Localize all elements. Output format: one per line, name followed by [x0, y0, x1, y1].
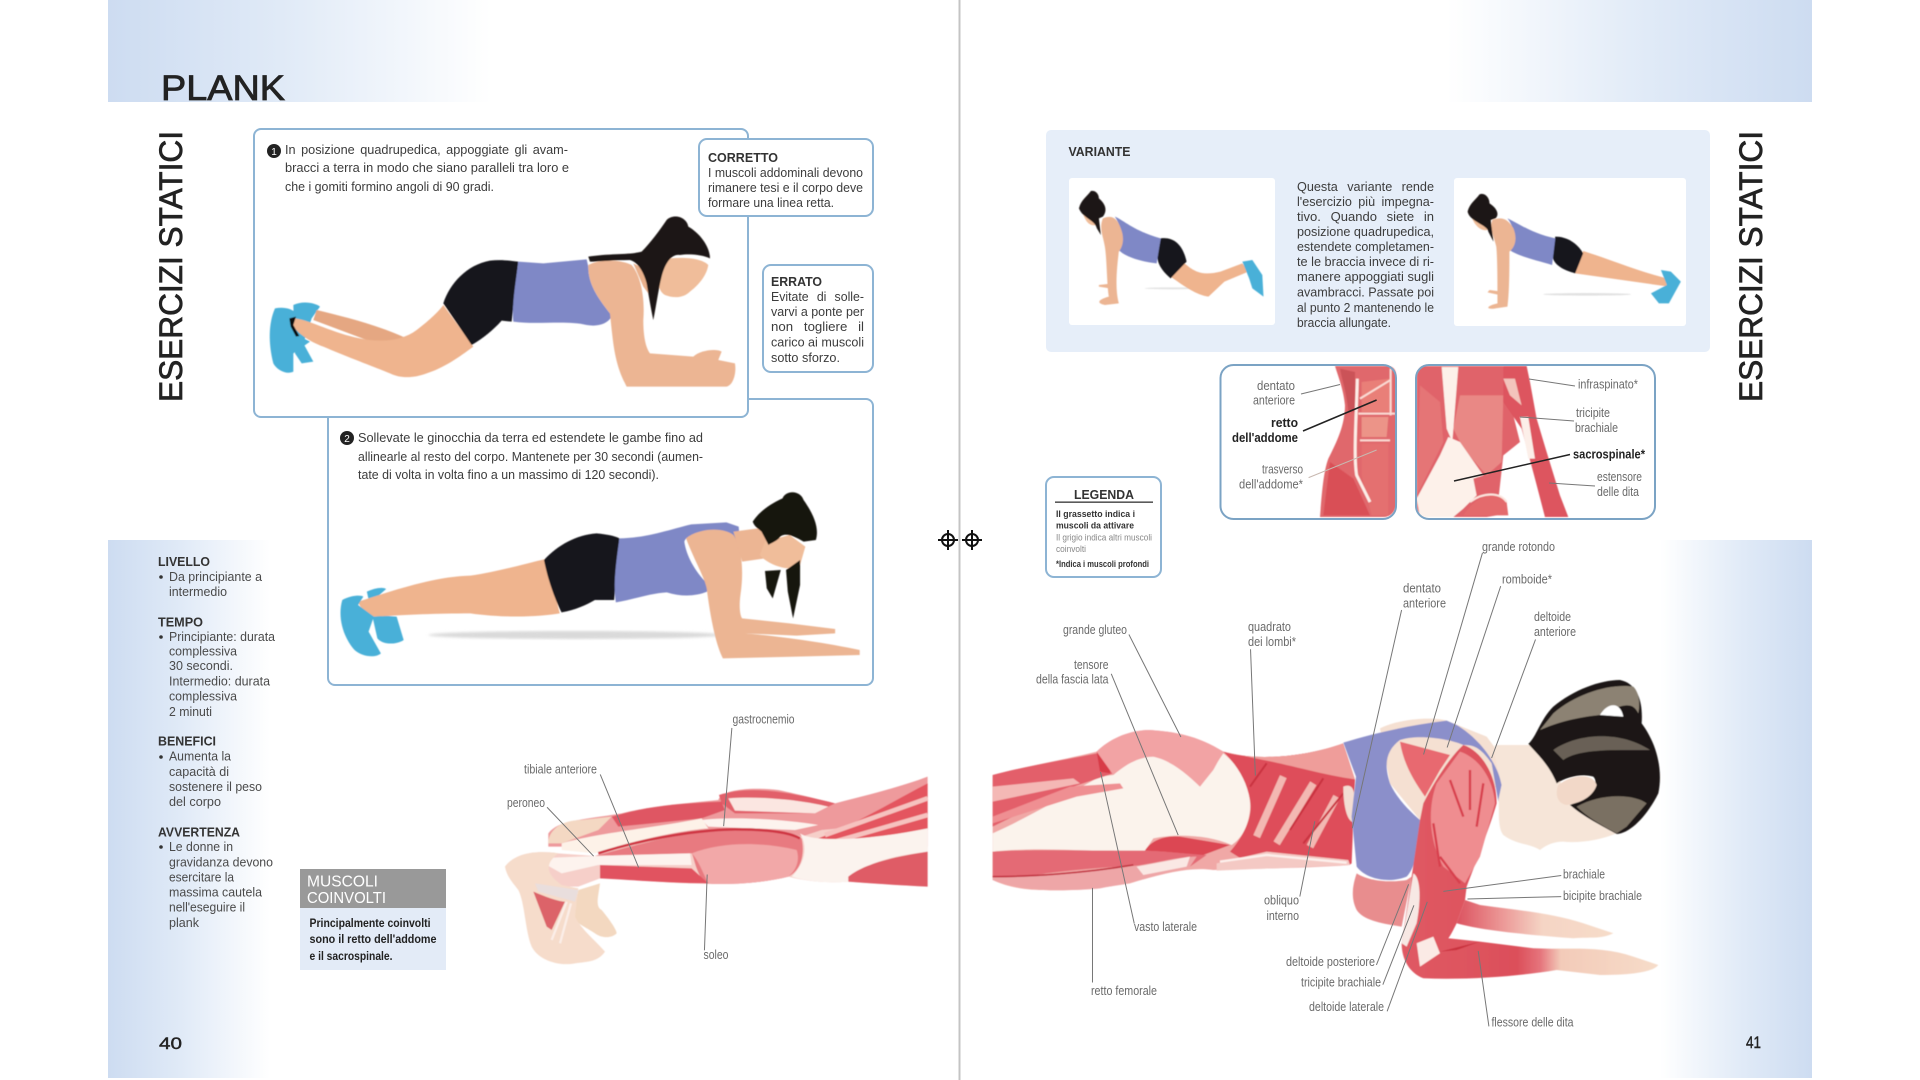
callout: corretto: rimanere tesi e il corpo deve [708, 180, 863, 195]
info: tempo: Intermedio: durata [169, 674, 271, 688]
sidebar band left [108, 540, 270, 1078]
panel: abdomen muscles: anteriore [1253, 392, 1295, 408]
anatomy labels: flessore delle dita [1492, 1015, 1574, 1030]
info: avvertenza: gravidanza devono [169, 854, 273, 870]
step 1 number: 1 [271, 147, 277, 158]
legend: muscoli da attivare [1056, 521, 1134, 531]
anatomy labels: della fascia lata [1036, 672, 1109, 687]
section title left: ESERCIZI STATICI [153, 131, 189, 402]
panel: abdomen muscles: dell'addome [1232, 430, 1298, 445]
anatomy labels: grande rotondo [1482, 539, 1555, 554]
info: avvertenza [158, 824, 273, 930]
info: tempo: 30 secondi. [169, 658, 233, 673]
callout: corretto: I muscoli addominali devono [708, 165, 863, 180]
anatomy labels: brachiale [1563, 867, 1605, 882]
variant text: posizione quadrupedica, [1297, 224, 1434, 239]
anatomy labels: dei lombi* [1248, 634, 1296, 649]
variant text: tivo. Quando siete in [1297, 209, 1434, 224]
variant text: l'esercizio più impegna- [1297, 194, 1434, 209]
anatomy labels: interno [1266, 908, 1299, 923]
anatomy labels: deltoide laterale [1309, 999, 1384, 1014]
photo: variant 2 [1454, 178, 1686, 326]
info: benefici [158, 734, 262, 809]
info: avvertenza: plank [169, 915, 199, 930]
variant text: manere appoggiati sugli [1297, 269, 1434, 284]
panel: variante: VARIANTE [1068, 144, 1131, 159]
page number 40: 40 [159, 1034, 182, 1053]
panel: back muscles: brachiale [1575, 420, 1618, 435]
panel: muscoli coinvolti: sono il retto dell'addome [310, 932, 437, 946]
anatomy labels: obliquo [1264, 893, 1299, 908]
info: livello [158, 554, 263, 599]
step 1 text: che i gomiti formino angoli di 90 gradi. [285, 179, 494, 194]
info: avvertenza: Le donne in [169, 839, 233, 854]
info: tempo: TEMPO [158, 614, 203, 630]
step 2 text: allinearle al resto del corpo. Mantenete per 30 secondi (aumen- [358, 449, 703, 464]
anatomy labels: anteriore [1403, 596, 1446, 610]
header band right [1447, 0, 1812, 102]
variant text: estendete completamen- [1297, 239, 1434, 254]
callout: corretto [699, 139, 873, 216]
panel: muscoli coinvolti: e il sacrospinale. [310, 949, 392, 963]
anatomy labels: romboide* [1502, 572, 1552, 587]
shoulder skin [1380, 719, 1502, 820]
step 1 number [267, 144, 281, 158]
leg leader lines [547, 728, 732, 950]
anatomy labels: anteriore [1534, 624, 1576, 639]
far forearm [1457, 900, 1613, 938]
panel: muscoli coinvolti: MUSCOLI [307, 874, 378, 890]
legend [1046, 477, 1161, 577]
anatomy: upper body, arms and head [1343, 680, 1660, 979]
anatomy labels: tricipite brachiale [1301, 975, 1381, 990]
page number 41: 41 [1746, 1033, 1761, 1052]
variant text: avambracci. Passate poi [1297, 284, 1434, 300]
leg labels: tibiale anteriore [524, 762, 597, 776]
step 2 text [358, 430, 703, 482]
info: livello: intermedio [169, 584, 227, 599]
panel: back muscles: sacrospinale* [1573, 447, 1646, 462]
header band left [108, 0, 492, 102]
step 1 text: bracci a terra in modo che siano paralleli tra loro e [285, 160, 569, 175]
callout: errato: ERRATO [771, 274, 822, 289]
leg labels: soleo [704, 947, 728, 962]
face and neck [1495, 745, 1617, 850]
panel: step 2 [328, 399, 873, 685]
title: PLANK [161, 69, 285, 108]
callout: corretto: CORRETTO [708, 150, 778, 165]
step 2 number [340, 431, 354, 445]
variant text [1297, 179, 1434, 330]
callout: errato: non togliere il [771, 319, 864, 334]
legend: Il grassetto indica i [1056, 509, 1135, 519]
info: benefici: BENEFICI [158, 734, 216, 748]
info: avvertenza: AVVERTENZA [158, 824, 241, 840]
anatomy: hips and thighs [993, 730, 1356, 890]
info: avvertenza: nell'eseguire il [169, 900, 245, 915]
photo: variant 1 [1069, 178, 1275, 325]
info: tempo [158, 614, 276, 719]
info: benefici: capacità di [169, 764, 229, 779]
panel: abdomen muscles: dentato [1257, 378, 1295, 393]
callout: corretto: formare una linea retta. [708, 195, 834, 210]
far arm [1353, 873, 1412, 927]
step 1 text [285, 142, 569, 194]
photo: full plank [340, 492, 860, 658]
anatomy: lower legs [505, 777, 928, 964]
step 2 text: Sollevate le ginocchia da terra ed estendete le gambe fino ad [358, 430, 703, 445]
ear [1557, 776, 1597, 805]
callout: errato: Evitate di solle- [771, 289, 864, 304]
anatomy labels: dentato [1403, 580, 1441, 595]
panel: abdomen muscles: trasverso [1262, 461, 1303, 476]
info: avvertenza: massima cautela [169, 884, 263, 900]
info: tempo: Principiante: durata [169, 629, 276, 644]
info: benefici: sostenere il peso [169, 779, 262, 794]
photo: knees plank [270, 217, 735, 387]
panel: back muscles: delle dita [1597, 484, 1640, 499]
variant text: Questa variante rende [1297, 179, 1434, 194]
blue top [1343, 721, 1502, 880]
callout: errato [763, 265, 873, 372]
step 1 text: In posizione quadrupedica, appoggiate gli avam- [285, 142, 568, 157]
info: benefici: Aumenta la [169, 749, 232, 764]
legend: Il grigio indica altri muscoli [1056, 532, 1152, 542]
info: benefici: del corpo [169, 794, 221, 809]
callout: errato: carico ai muscoli [771, 334, 864, 350]
anatomy labels: bicipite brachiale [1563, 888, 1642, 903]
anatomy labels: vasto laterale [1134, 919, 1197, 934]
info: livello: LIVELLO [158, 554, 210, 569]
step 2 number: 2 [344, 434, 350, 445]
anatomy labels: retto femorale [1091, 983, 1157, 998]
leg labels: gastrocnemio [732, 712, 794, 726]
panel: muscoli coinvolti: COINVOLTI [307, 890, 386, 907]
anatomy labels: grande gluteo [1063, 622, 1127, 637]
panel: back muscles: infraspinato* [1578, 377, 1638, 392]
variant text: braccia allungate. [1297, 315, 1391, 330]
callout: errato: varvi a ponte per [771, 304, 865, 319]
step 2 text: tate di volta in volta fino a un massimo di 120 secondi). [358, 467, 659, 482]
leg labels: peroneo [507, 795, 545, 810]
panel: abdomen muscles: dell'addome* [1239, 477, 1303, 492]
anatomy labels: tensore [1074, 657, 1108, 672]
panel: back muscles: estensore [1597, 469, 1642, 484]
section title right: ESERCIZI STATICI [1733, 131, 1769, 402]
anatomy labels: quadrato [1248, 619, 1291, 634]
sidebar band right [1660, 540, 1812, 1078]
legend: LEGENDA [1074, 487, 1135, 502]
panel: variante [1046, 130, 1710, 352]
callout: errato: sotto sforzo. [771, 350, 840, 365]
info: tempo: 2 minuti [169, 704, 212, 719]
info: tempo: complessiva [169, 644, 238, 658]
panel: abdomen muscles: retto [1271, 415, 1298, 430]
info: livello: Da principiante a [169, 569, 263, 584]
leg labels [507, 712, 794, 962]
legend: *Indica i muscoli profondi [1056, 559, 1149, 569]
panel: muscoli coinvolti [300, 869, 446, 970]
anatomy labels [1036, 539, 1642, 1030]
anatomy leader lines [1092, 553, 1561, 1026]
center fold line [958, 0, 960, 1080]
anatomy labels: deltoide [1534, 609, 1571, 624]
near arm [1402, 745, 1658, 979]
panel: step 1 [254, 129, 748, 417]
panel: back muscles: tricipite [1576, 405, 1610, 420]
panel: muscoli coinvolti: Principalmente coinvolti [310, 916, 430, 930]
info: tempo: complessiva [169, 688, 238, 704]
panel: abdomen muscles [1220, 365, 1397, 519]
variant text: te le braccia invece di ri- [1297, 254, 1434, 269]
variant text: al punto 2 mantenendo le [1297, 300, 1434, 315]
info: avvertenza: esercitare la [169, 869, 235, 884]
anatomy labels: deltoide posteriore [1286, 954, 1375, 969]
legend: coinvolti [1056, 544, 1086, 554]
registration marks [938, 530, 982, 550]
hair [1528, 680, 1660, 834]
panel: back muscles [1416, 365, 1655, 519]
